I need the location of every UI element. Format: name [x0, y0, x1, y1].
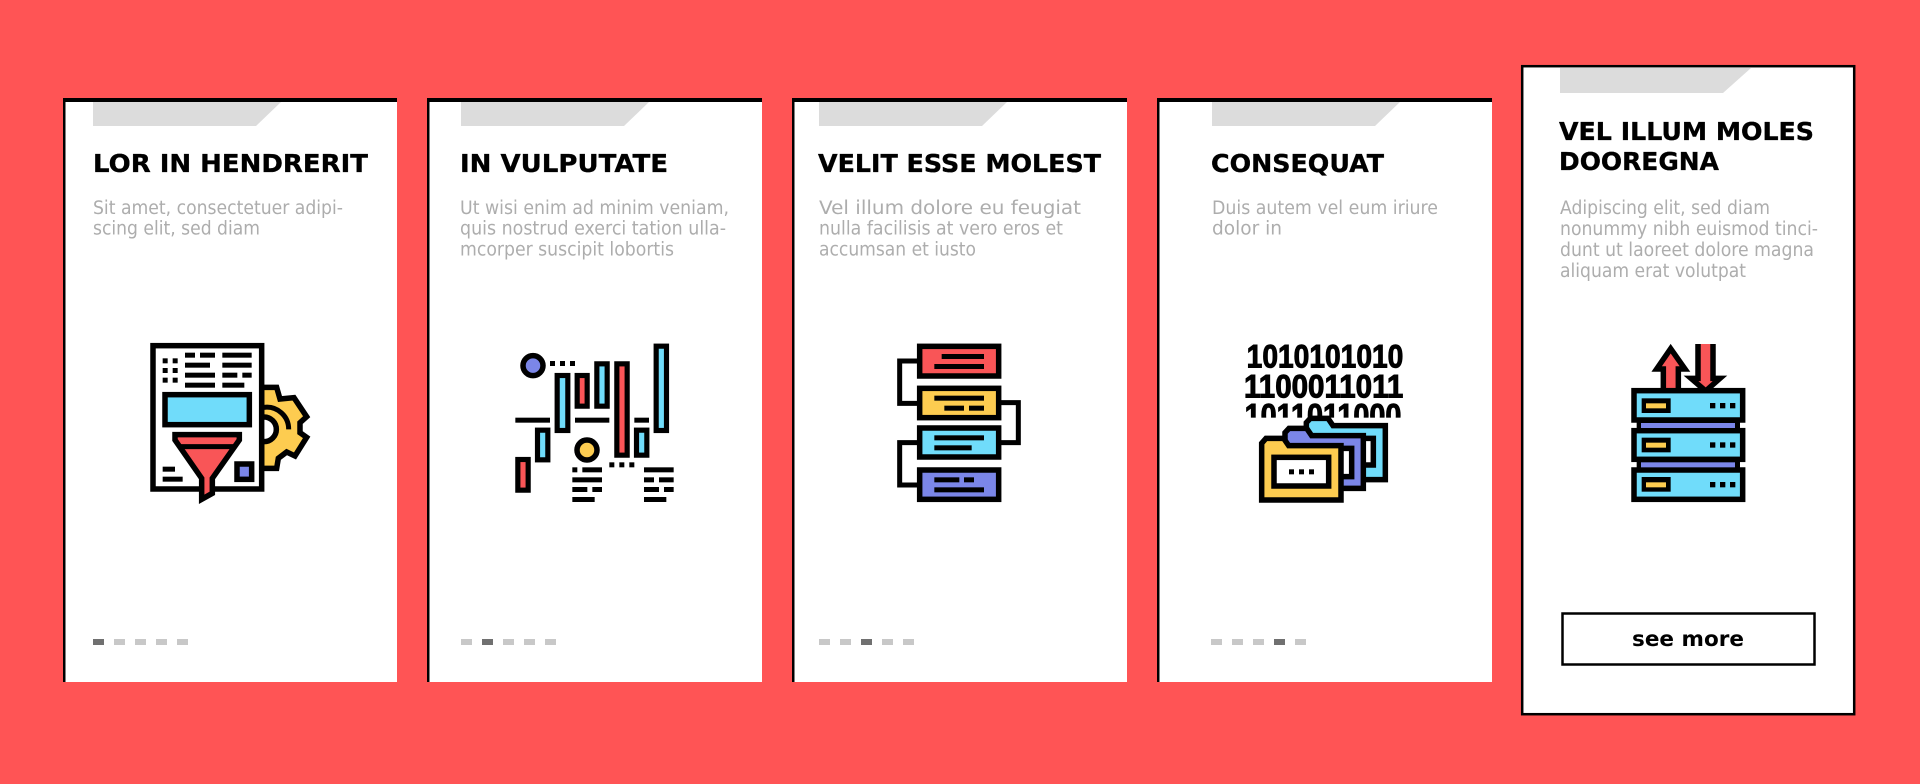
binary digits: 1100011011: [1244, 369, 1403, 405]
gear: [252, 387, 307, 468]
card 3 tab: [819, 102, 1007, 126]
card 2 description: Ut wisi enim ad minim veniam,: [460, 198, 729, 219]
card 4 description: dolor in: [1212, 218, 1282, 240]
purple circle: [523, 356, 543, 376]
binary digits: [1244, 338, 1403, 434]
blue panel: [165, 395, 249, 425]
red box: [920, 346, 999, 376]
card 5 body: [1522, 66, 1854, 714]
down arrow: [1691, 344, 1720, 391]
card 1 heading: LOR IN HENDRERIT: [93, 149, 368, 178]
connectors: [900, 361, 1018, 485]
pagination: card 4: [1211, 639, 1306, 645]
panel: card 1: [63, 98, 397, 682]
box text lines: [934, 354, 984, 492]
document: [153, 346, 262, 489]
server units: [1634, 391, 1743, 499]
card 2 description: [460, 198, 729, 260]
pagination: card 3: [819, 639, 914, 645]
card 1 edge: [63, 98, 397, 682]
card 2 heading: IN VULPUTATE: [460, 149, 668, 178]
card 3 body: [792, 98, 1127, 682]
see more button: see more: [1632, 627, 1744, 652]
card 3 edge: [792, 98, 1127, 682]
card 2 tab: [461, 102, 649, 126]
purple box: [920, 470, 999, 499]
pagination: card 1: [93, 639, 188, 645]
card 3 description: [819, 198, 1081, 260]
digit mask: [1240, 418, 1407, 431]
yellow box: [920, 388, 999, 418]
funnel: [175, 435, 239, 499]
card 1 body: [63, 98, 397, 682]
bars: [518, 346, 666, 490]
card 5 description: dunt ut laoreet dolore magna: [1560, 240, 1814, 261]
card 2 edge: [427, 98, 762, 682]
card 4 tab: [1212, 102, 1400, 126]
card 5 description: Adipiscing elit, sed diam: [1560, 198, 1770, 219]
card 5 tab: [1560, 68, 1751, 93]
panel: card 4: [1157, 98, 1492, 682]
document text: [163, 353, 252, 482]
panel: card 2: [427, 98, 762, 682]
icon: linked flow boxes: [900, 346, 1018, 499]
pagination: card 2: [461, 639, 556, 645]
front folder: [1262, 438, 1341, 500]
binary digits: 1011011000: [1245, 398, 1401, 434]
blue box: [920, 428, 999, 457]
card 5 description: aliquam erat volutpat: [1560, 261, 1746, 282]
card 2 description: mcorper suscipit lobortis: [460, 240, 674, 260]
card 5 description: [1560, 198, 1818, 282]
card 3 description: nulla facilisis at vero eros et: [819, 218, 1063, 240]
icon: candlestick chart: [515, 346, 674, 502]
card 4 heading: CONSEQUAT: [1211, 149, 1384, 178]
card 1 description: scing elit, sed diam: [93, 218, 260, 240]
see more button: [1562, 614, 1814, 664]
card 3 heading: VELIT ESSE MOLEST: [818, 149, 1101, 178]
card 2 body: [427, 98, 762, 682]
binary digits: 1010101010: [1247, 338, 1403, 374]
card 4 description: Duis autem vel eum iriure: [1212, 198, 1438, 219]
middle folder: [1285, 428, 1363, 488]
card 5 description: nonummy nibh euismod tinci-: [1560, 219, 1818, 240]
icon: server with transfer arrows: [1634, 344, 1743, 499]
panel: card 3: [792, 98, 1127, 682]
card 3 description: accumsan et iusto: [819, 240, 976, 260]
server lights: [1642, 398, 1735, 492]
card 4 edge: [1157, 98, 1492, 682]
card 5 heading: VEL ILLUM MOLES: [1559, 117, 1814, 146]
yellow circle: [577, 440, 597, 460]
purple square: [237, 464, 252, 479]
card 1 description: Sit amet, consectetuer adipi-: [93, 198, 343, 219]
card 5 heading: [1559, 117, 1814, 176]
card 2 description: quis nostrud exerci tation ulla-: [460, 218, 726, 240]
card 4 body: [1157, 98, 1492, 682]
card 1 description: [93, 198, 343, 240]
panel: card 5: [1522, 66, 1854, 714]
back folder: [1306, 418, 1385, 480]
up arrow: [1657, 349, 1685, 390]
card 1 tab: [93, 102, 281, 126]
middle connectors: [1637, 420, 1740, 471]
card 4 description: [1212, 198, 1438, 240]
icon: document filter and gear: [153, 346, 307, 499]
card 3 description: Vel illum dolore eu feugiat: [819, 198, 1081, 219]
card 5 heading: DOOREGNA: [1559, 147, 1720, 176]
icon: binary data and folders: [1240, 338, 1407, 500]
chart dashes and text lines: [515, 361, 674, 502]
